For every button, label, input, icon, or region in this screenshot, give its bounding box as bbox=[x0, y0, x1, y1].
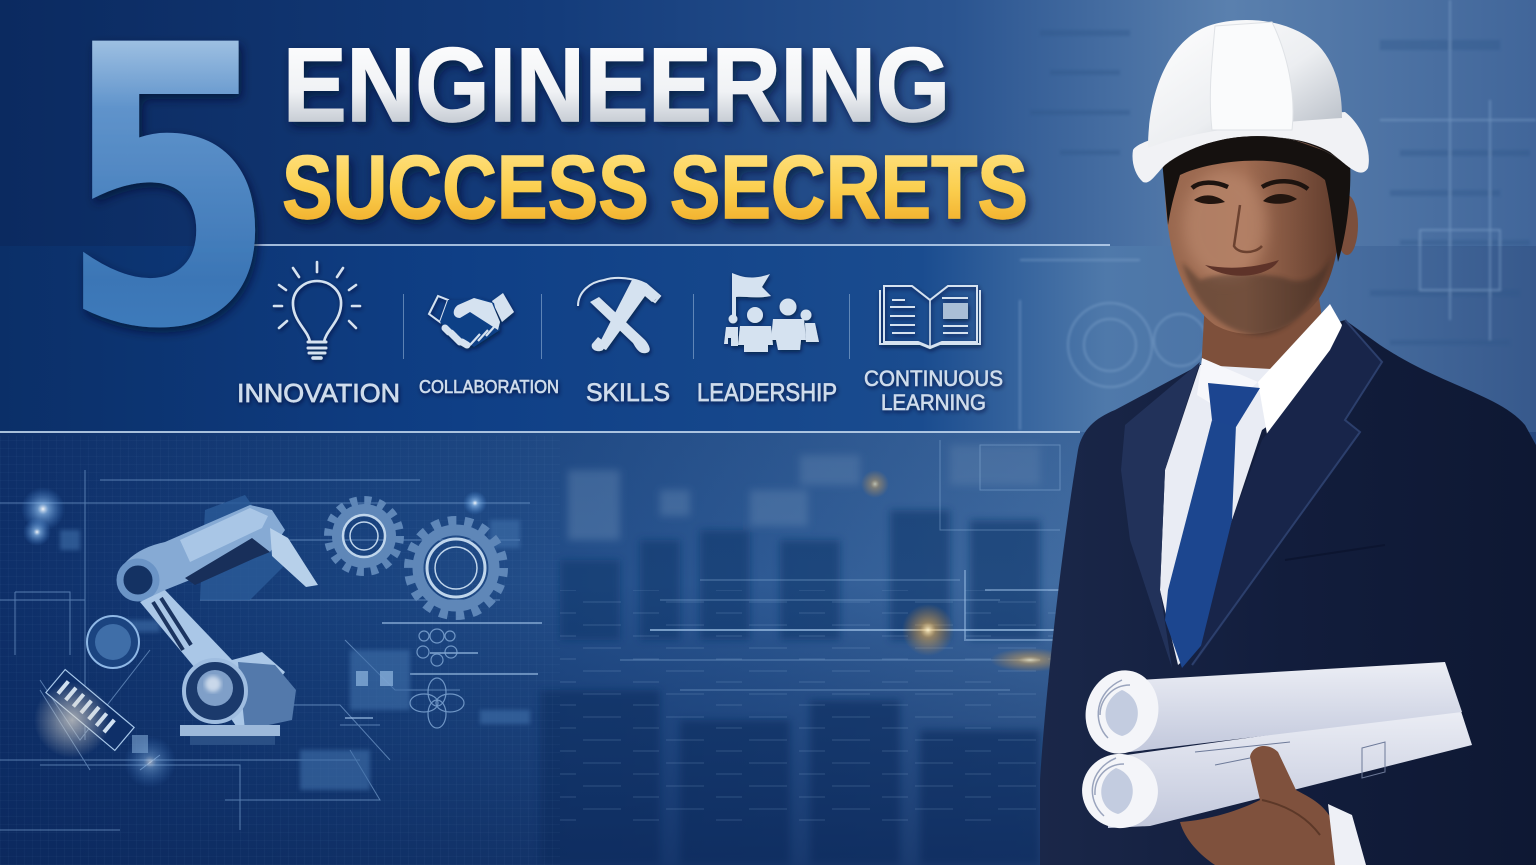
base foot bbox=[190, 736, 275, 745]
lower arm bbox=[140, 590, 285, 732]
hub ball bbox=[197, 670, 233, 706]
small squares bbox=[132, 671, 393, 753]
arm shadow panel bbox=[200, 495, 290, 600]
chip glow bbox=[34, 682, 110, 758]
tie blade bbox=[1165, 420, 1236, 668]
background: lower skyline blocks bbox=[540, 445, 1040, 865]
label: collaboration: COLLABORATION bbox=[419, 376, 559, 397]
label: skills: SKILLS bbox=[586, 379, 670, 407]
icon: light bulb bbox=[274, 262, 360, 358]
eyes bbox=[1194, 194, 1297, 204]
ear bbox=[1336, 195, 1358, 255]
gear small bbox=[331, 503, 397, 569]
label: continuous learning: LEARNING bbox=[881, 390, 986, 415]
blueprint roll upper bbox=[1100, 662, 1462, 752]
amber lens flares bbox=[902, 604, 1083, 672]
shoulder ring bbox=[120, 562, 156, 598]
upper arm dark side bbox=[185, 538, 270, 585]
gear large bbox=[411, 523, 501, 613]
icon: tools bbox=[578, 278, 660, 353]
lower roll end bbox=[1074, 745, 1166, 837]
helmet brim bbox=[1132, 112, 1369, 183]
label: continuous learning bbox=[864, 366, 1003, 415]
icon: leadership team bbox=[724, 273, 819, 352]
hub highlight bbox=[205, 676, 221, 692]
circle sensor bbox=[87, 616, 139, 668]
blueprint roll lower bbox=[1105, 708, 1472, 828]
upper arm light facet bbox=[180, 508, 268, 562]
helmet shadow band bbox=[1165, 136, 1340, 165]
beard shadow bbox=[1182, 255, 1332, 335]
circuit micro text bars bbox=[345, 622, 542, 719]
head bbox=[1165, 130, 1342, 334]
hand bbox=[1180, 746, 1335, 865]
neck bbox=[1200, 290, 1325, 400]
tie knot bbox=[1208, 383, 1260, 427]
title line 1: ENGINEERING bbox=[283, 27, 950, 144]
nose bbox=[1234, 205, 1262, 252]
blurred tech panels bbox=[60, 520, 530, 790]
label: continuous learning: CONTINUOUS bbox=[864, 366, 1003, 391]
shirt bbox=[1160, 325, 1335, 665]
upper roll end bbox=[1076, 662, 1168, 762]
background: top band bbox=[0, 0, 1536, 246]
hub ring bbox=[184, 660, 246, 722]
lapel edge bbox=[1192, 320, 1382, 665]
background: tech grid bbox=[0, 436, 560, 865]
icon row separators bbox=[403, 294, 850, 359]
left lapel bbox=[1121, 362, 1200, 668]
divider bottom bbox=[0, 431, 1080, 433]
collar right bbox=[1258, 304, 1342, 440]
upper arm bbox=[120, 505, 285, 601]
blueprint drawing marks bbox=[1195, 742, 1385, 778]
forearm gripper bbox=[270, 528, 318, 587]
lower arm slot bbox=[153, 598, 191, 650]
helmet ridge bbox=[1210, 22, 1293, 130]
divider top bbox=[250, 244, 1110, 246]
flower diagrams bbox=[410, 629, 464, 728]
mouth bbox=[1205, 260, 1279, 276]
robot arm bbox=[120, 495, 318, 745]
glow dots bbox=[21, 470, 889, 788]
background: horizontal light data lines bbox=[620, 440, 1060, 690]
background: data dashes texture bbox=[560, 590, 1060, 830]
title line 2: SUCCESS SECRETS bbox=[282, 138, 1028, 238]
jacket body bbox=[1040, 320, 1536, 865]
base body bbox=[238, 662, 296, 730]
helmet dome bbox=[1148, 20, 1342, 148]
face highlight bbox=[1183, 170, 1267, 280]
chip block bbox=[46, 670, 134, 750]
background: top-right blueprint pattern bbox=[1020, 0, 1536, 430]
label: innovation: INNOVATION bbox=[237, 378, 400, 408]
icon: open book bbox=[880, 286, 980, 348]
circuit lines bbox=[0, 470, 530, 830]
shirt cuff bbox=[1328, 804, 1366, 865]
person: engineer bbox=[1040, 20, 1536, 865]
hair bbox=[1162, 135, 1350, 262]
base plate bbox=[180, 725, 280, 736]
thumb shadow bbox=[1262, 800, 1320, 835]
label: leadership: LEADERSHIP bbox=[697, 379, 837, 407]
background: lower tech band bbox=[0, 432, 1536, 865]
background: lower dark fade bbox=[0, 432, 1100, 865]
icon: handshake bbox=[429, 293, 514, 347]
background: icon band bbox=[0, 246, 1536, 432]
eyebrows bbox=[1192, 181, 1308, 189]
breast pocket bbox=[1285, 545, 1385, 560]
collar left bbox=[1197, 358, 1258, 412]
right lapel bbox=[1192, 320, 1382, 668]
